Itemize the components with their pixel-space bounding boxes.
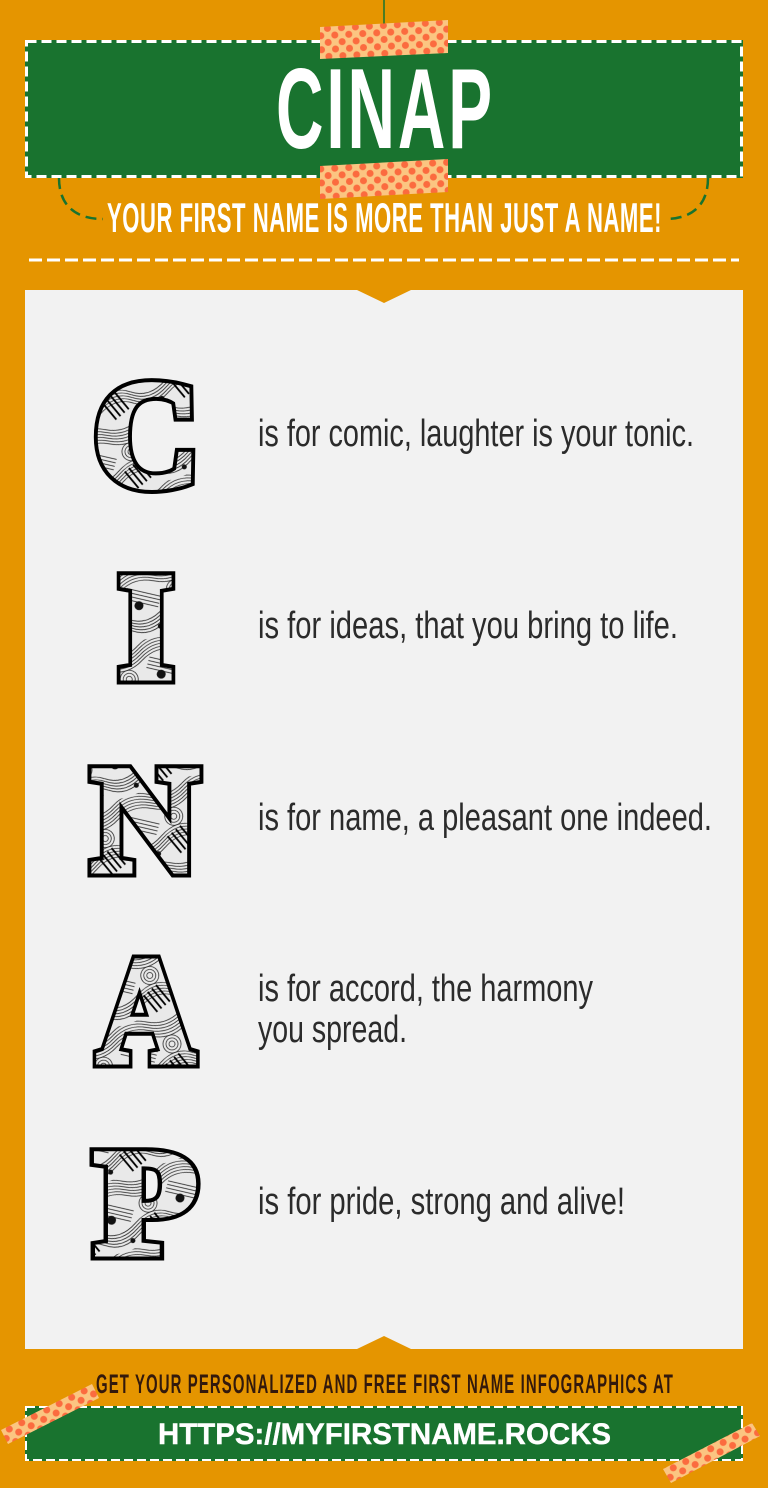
bracket: right: [665, 178, 708, 219]
icon: letter A: A: [98, 928, 194, 1094]
icon: letter I: I: [119, 544, 173, 710]
icon: letter C: C: [94, 352, 199, 518]
title banner: [25, 40, 743, 178]
row: letter N: [92, 737, 712, 903]
text: P line: is for pride, strong and alive!: [258, 1181, 625, 1223]
text: A lines: [258, 968, 593, 1051]
footer url: HTTPS://MYFIRSTNAME.ROCKS: [158, 1418, 611, 1451]
tape: banner top: [320, 20, 448, 59]
text: A lines: is for accord, the harmony: [258, 968, 593, 1010]
row: letter I: [119, 544, 678, 710]
bracket: left: [59, 178, 103, 219]
row: letter A: [98, 928, 593, 1094]
title: CINAP: [276, 46, 495, 173]
footer banner: [25, 1406, 743, 1461]
icon: letter I: I: [119, 544, 173, 710]
panel: letters: [25, 290, 743, 1349]
tape: banner bottom: [320, 159, 448, 199]
tape: footer left: [1, 1384, 99, 1444]
text: A lines: you spread.: [258, 1009, 407, 1051]
row: letter C: [94, 352, 694, 518]
icon: letter N: N: [92, 737, 198, 903]
icon: letter A: A: [98, 928, 194, 1094]
tape: footer right: [663, 1423, 760, 1483]
icon: letter P: P: [95, 1120, 197, 1286]
row: letter P: [95, 1120, 625, 1286]
hanging line: [383, 0, 385, 24]
icon: letter N: N: [92, 737, 198, 903]
icon: letter C: C: [94, 352, 199, 518]
dashed divider: [29, 258, 739, 262]
icon: letter P: P: [95, 1120, 197, 1286]
